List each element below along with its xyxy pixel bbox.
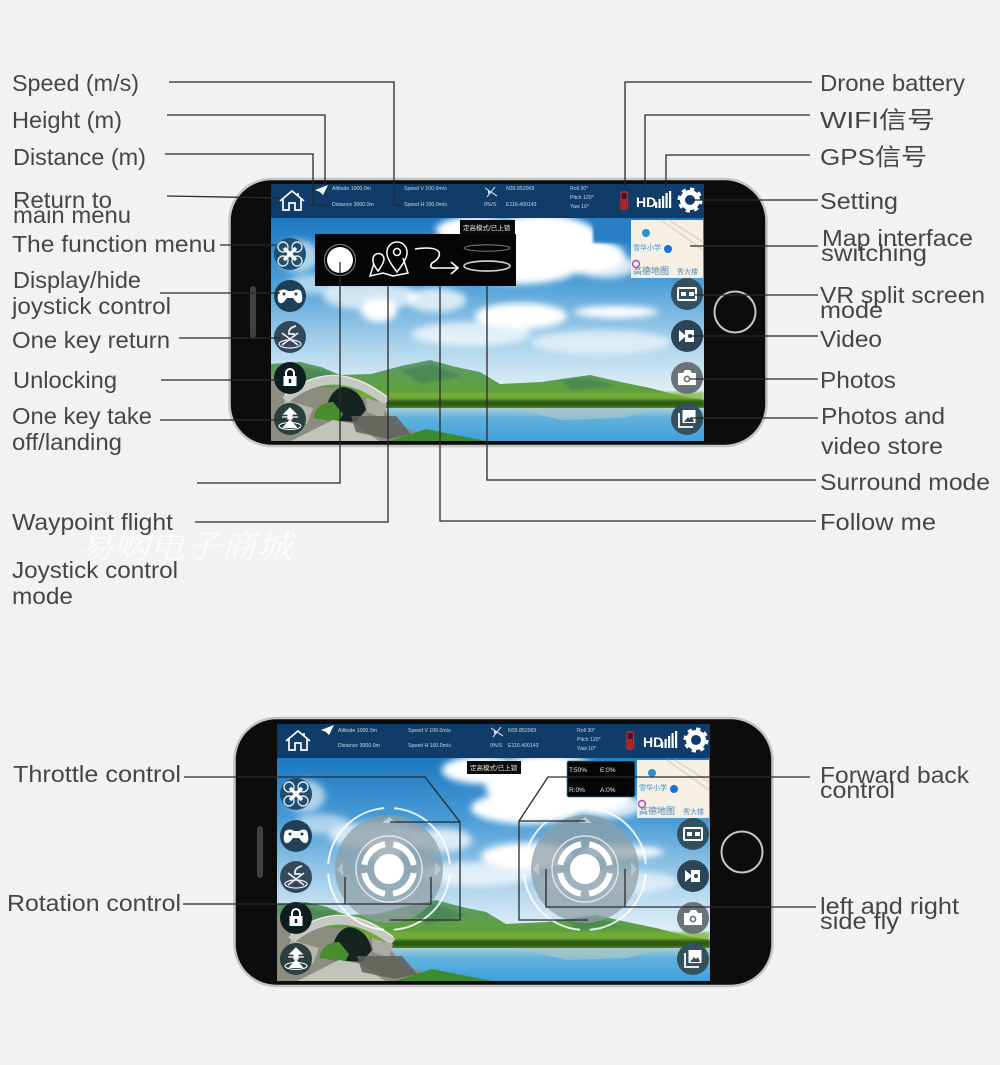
landscape background: [271, 214, 704, 441]
left buttons: [274, 238, 306, 435]
labels: top phone right: Follow me: [820, 509, 936, 535]
flight readouts: Yaw 10°: [570, 204, 589, 210]
labels: bottom phone: control: [820, 777, 895, 803]
labels: top phone right: Video: [820, 326, 882, 352]
labels: top phone right: Photos: [820, 367, 896, 393]
labels: top phone right: Surround mode: [820, 469, 990, 495]
flight readouts: N39.852069: [506, 186, 534, 192]
labels: top phone right: Map interface: [822, 225, 973, 251]
labels: top phone left: One key take: [12, 403, 152, 429]
mode tag: 定高模式/已上锁: [470, 763, 518, 772]
labels: top phone right: switching: [821, 240, 927, 266]
mode tag: 定高模式/已上锁: [463, 223, 511, 232]
flight readouts: Yaw 10°: [577, 746, 596, 752]
labels: top phone left: The function menu: [12, 231, 216, 257]
HD signal: HD: [636, 194, 656, 210]
labels: top phone right: VR split screen: [820, 282, 985, 308]
icon: waypoint map: [370, 242, 408, 276]
flight readouts: Roll 30°: [570, 186, 588, 192]
labels: top phone left: Joystick control: [12, 557, 178, 583]
labels: top phone right: WIFI信号: [820, 107, 935, 133]
labels: top phone left: off/landing: [12, 429, 122, 455]
map thumbnail: [631, 220, 703, 278]
left buttons: [280, 778, 312, 975]
labels: top phone right: Setting: [820, 188, 898, 214]
stick values panel: T:50%: [569, 767, 587, 774]
right buttons: [671, 278, 703, 435]
map thumbnail: 雪华小学: [639, 783, 667, 792]
labels: bottom phone: Throttle control: [13, 761, 181, 787]
HD signal: HD: [643, 734, 663, 750]
flight readouts: Speed H 100.0m/s: [404, 202, 447, 208]
flight readouts: E116.400143: [508, 743, 539, 749]
labels: bottom phone: left and right: [820, 893, 959, 919]
map thumbnail: 雪华小学: [633, 243, 661, 252]
flight readouts: E116.400143: [506, 202, 537, 208]
flight readouts: Distance 3000.0m: [338, 743, 380, 749]
landscape background: [277, 754, 710, 981]
watermark: 易购电子商城: [78, 530, 297, 566]
bottom phone: joystick screen: [234, 718, 772, 986]
flight readouts: Speed V 100.0m/s: [404, 186, 447, 192]
status bar: [271, 184, 704, 218]
mode tag: [467, 761, 521, 774]
flight readouts: 0%/S: [490, 743, 503, 749]
flight readouts: Roll 30°: [577, 728, 595, 734]
mode tag: [460, 220, 515, 234]
right joystick: [524, 808, 646, 930]
labels: bottom phone: side fly: [820, 908, 899, 934]
app screen: [277, 724, 710, 981]
labels: bottom phone: [7, 761, 969, 934]
flight readouts: Pitch 120°: [577, 737, 601, 743]
icon: follow arrow: [415, 248, 458, 274]
labels: top phone left: joystick control: [11, 293, 171, 319]
stick values panel: R:0%: [569, 787, 585, 794]
callout lines: bottom phone: [183, 777, 816, 920]
side speaker slot: [250, 286, 256, 338]
map thumbnail: 秀大楼: [683, 807, 704, 816]
callout lines: top phone left: [160, 82, 402, 522]
stick values panel: E:0%: [600, 767, 616, 774]
labels: top phone right: Photos and: [821, 403, 945, 429]
function menu panel: [315, 234, 516, 286]
map thumbnail: 高德地图: [639, 805, 675, 816]
map thumbnail: 高德地图: [633, 265, 669, 276]
flight readouts: 0%/S: [484, 202, 497, 208]
labels: top phone left: Display/hide: [13, 267, 141, 293]
labels: top phone left: Speed (m/s): [12, 70, 139, 96]
labels: top phone right: video store: [821, 433, 943, 459]
labels: top phone right: GPS信号: [820, 144, 927, 170]
status bar: [277, 724, 710, 758]
stick values panel: A:0%: [600, 787, 616, 794]
labels: top phone left: Unlocking: [13, 367, 117, 393]
app screen: [271, 184, 704, 441]
home button: [722, 832, 762, 872]
labels: top phone right: [820, 70, 990, 535]
flight readouts: [332, 186, 594, 210]
right buttons: [677, 818, 709, 975]
flight readouts: Speed H 100.0m/s: [408, 743, 451, 749]
flight readouts: [338, 728, 601, 752]
labels: bottom phone: Rotation control: [7, 890, 181, 916]
labels: top phone left: Return to: [13, 187, 112, 213]
labels: top phone left: Waypoint flight: [12, 509, 173, 535]
flight readouts: Speed V 100.0m/s: [408, 728, 451, 734]
labels: top phone right: mode: [820, 297, 883, 323]
callout lines: top phone right: [440, 82, 818, 521]
flight readouts: N39.852069: [508, 728, 536, 734]
labels: top phone left: main menu: [13, 202, 131, 228]
icon: joystick mode: [324, 244, 356, 276]
labels: top phone left: Height (m): [12, 107, 122, 133]
labels: top phone right: Drone battery: [820, 70, 965, 96]
labels: top phone left: Distance (m): [13, 144, 146, 170]
side speaker slot: [257, 826, 263, 878]
phone body: [234, 718, 772, 986]
map thumbnail: [637, 760, 709, 818]
flight readouts: Distance 3000.0m: [332, 202, 374, 208]
left joystick: [328, 808, 450, 930]
top phone: main control screen: [230, 179, 766, 446]
home button: [714, 292, 756, 332]
phone body: [230, 179, 766, 446]
labels: top phone left: One key return: [12, 327, 170, 353]
labels: bottom phone: Forward back: [820, 762, 969, 788]
icon: surround orbits: [464, 245, 510, 271]
flight readouts: Pitch 120°: [570, 195, 594, 201]
map thumbnail: 秀大楼: [677, 267, 698, 276]
flight readouts: Altitude 1000.0m: [332, 186, 371, 192]
flight readouts: Altitude 1000.0m: [338, 728, 377, 734]
labels: top phone left: mode: [12, 583, 73, 609]
stick values panel: [567, 761, 635, 797]
labels: top phone left: [11, 70, 216, 609]
